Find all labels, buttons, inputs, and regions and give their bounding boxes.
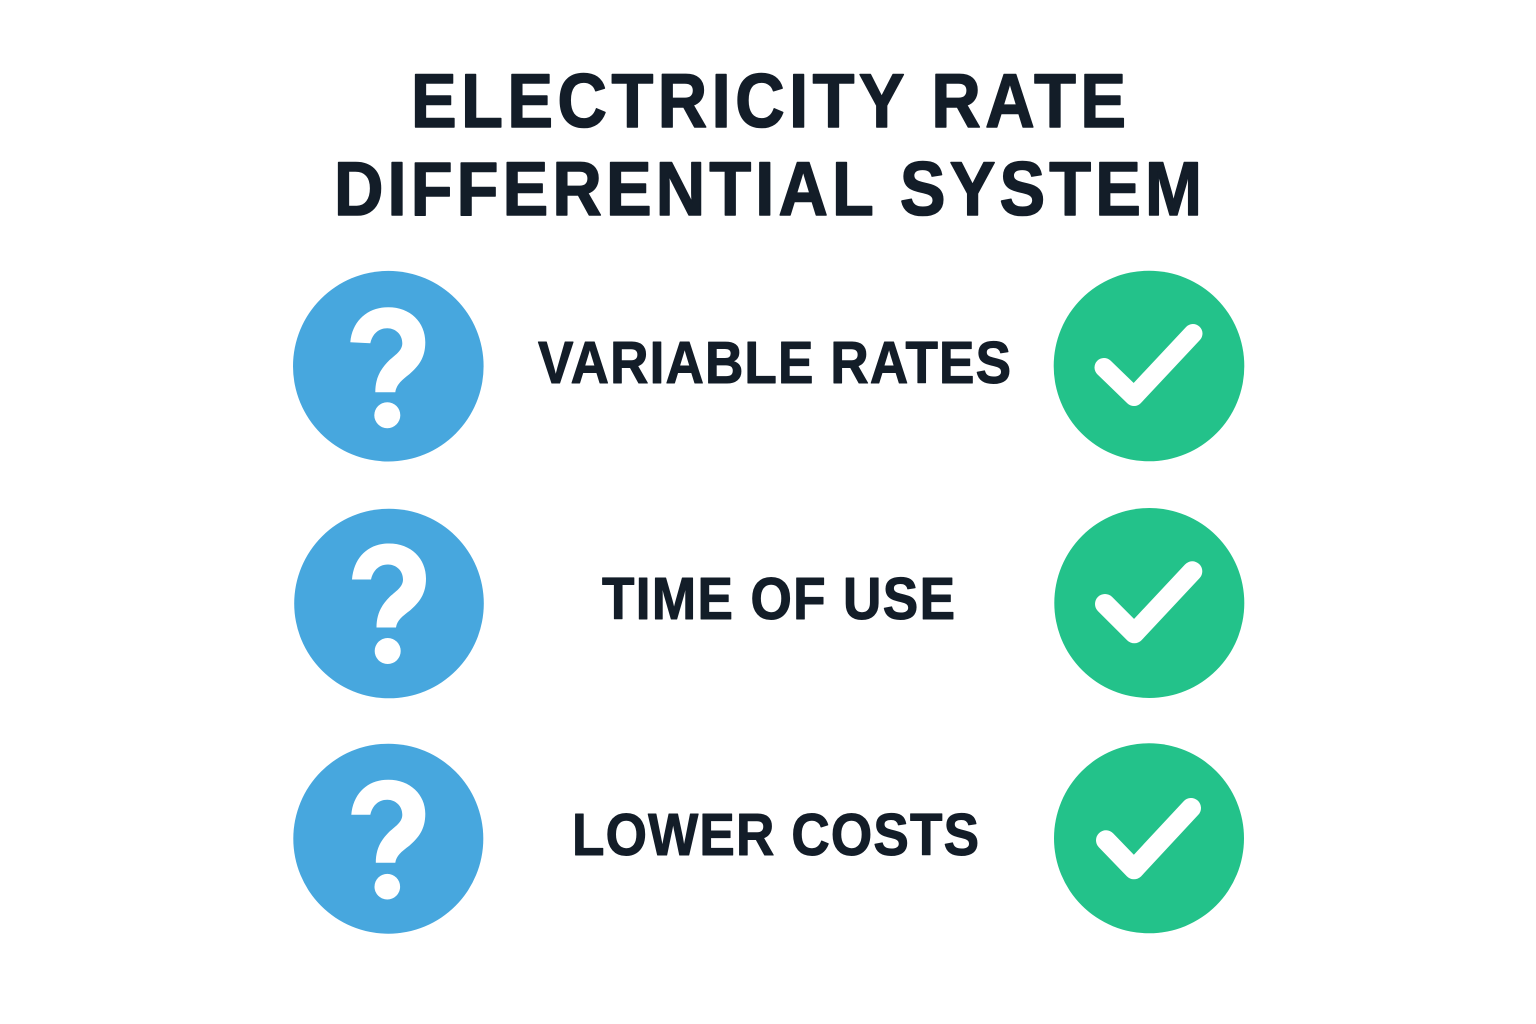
- row: time of use: [294, 508, 1244, 698]
- label: time of use: TIME OF USE: [602, 565, 955, 632]
- title: [334, 60, 1202, 232]
- icon: check mark: [1054, 743, 1244, 933]
- title: ELECTRICITY RATE: [411, 60, 1126, 144]
- label: variable rates: VARIABLE RATES: [538, 329, 1011, 396]
- row: variable rates: [293, 271, 1244, 462]
- label: lower costs: LOWER COSTS: [572, 801, 979, 868]
- row: lower costs: [293, 743, 1244, 934]
- icon: question mark: [293, 744, 483, 934]
- icon: question mark: [294, 509, 484, 698]
- icon: check mark: [1054, 271, 1244, 461]
- icon: question mark: [293, 271, 484, 462]
- title: DIFFERENTIAL SYSTEM: [334, 148, 1202, 232]
- icon: check mark: [1054, 508, 1244, 698]
